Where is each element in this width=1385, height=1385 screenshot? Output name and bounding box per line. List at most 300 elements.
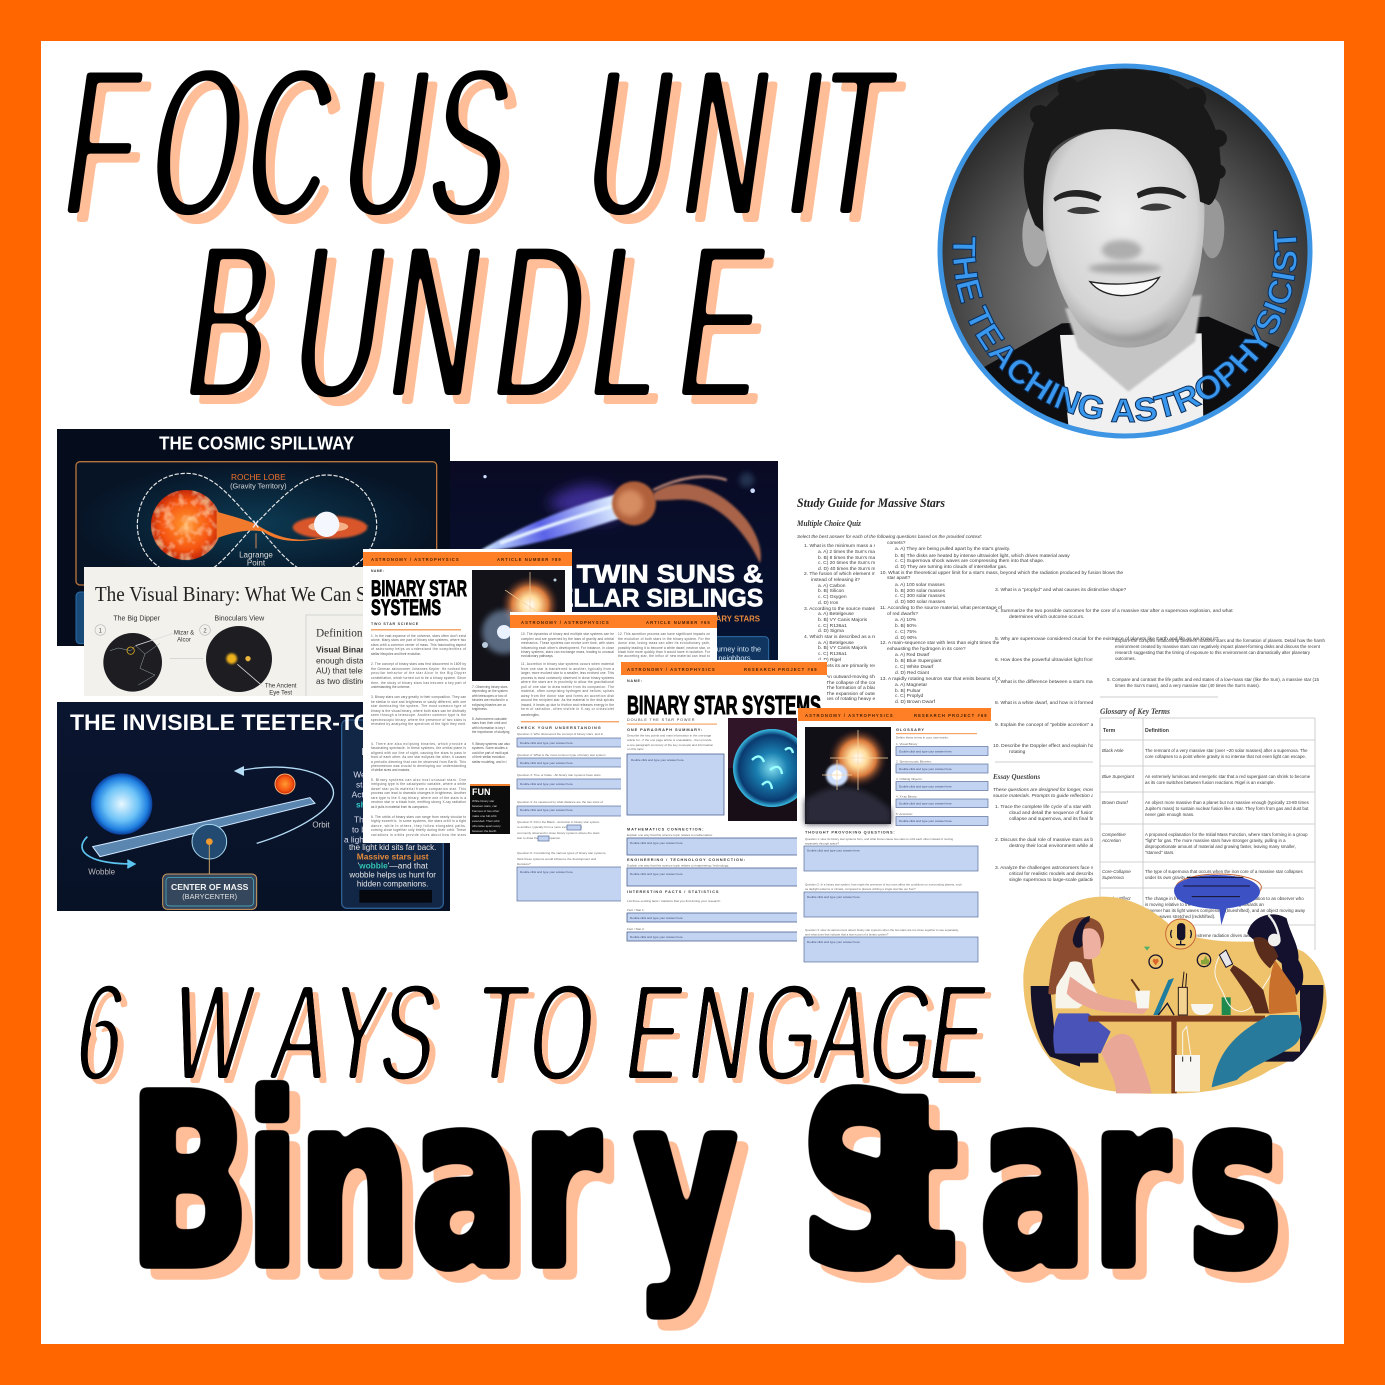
article page 2: check your understanding: material, often comprising hydrogen and helium, spirals [521,689,614,693]
quiz column 1: 2. The fusion of which element mark [804,571,883,577]
body text column 2: with telescopes or two of [472,694,507,698]
label: mizar and alcor: Mizar & [174,631,194,637]
quiz column 2: b. B) 50% [895,623,917,629]
body text column 1: as it pulls in material from its companion. [371,805,429,809]
plasma arc [653,484,761,563]
body text column 1: be similar in size and brightness or vastly different, with one [371,700,466,704]
glossary table: Accretion [1101,838,1121,843]
article page 2: check your understanding: Double click and type your answer here. [520,782,574,786]
research project page: Double click and type your answer here. [630,916,684,920]
fun fact box [470,784,515,834]
body text column 2 [472,685,510,764]
fun fact box: extended. Their orbit [472,819,500,823]
research project page 2: glossary: Define these terms in your own words: [896,736,949,740]
label: roche lobe: ROCHE LOBE [231,472,286,482]
body text column 2: stellar modeling, and in t [472,760,507,764]
label: lagrange point: Lagrange [239,550,273,559]
essay continuation [1100,638,1325,697]
body text column 1: process can lead to dramatic changes in brightness. Another [371,791,467,795]
quiz column 1: d. D) Iron [818,600,839,606]
nose shadow [1102,240,1142,260]
article page 2: check your understanding: commonly observed in close binary systems where the stars [517,831,600,835]
engineering connection: ENGINEERING / TECHNOLOGY CONNECTION: [627,857,746,862]
quiz column 1: 1. What is the minimum mass a star [804,543,882,549]
short answer column: 3. What is a "proplyd" and what causes its distinctive shape? [995,587,1127,593]
body text column 2: could be part of multi-syst [472,751,508,755]
research project page 2: glossary: 2. Spectroscopic Binaries: [896,760,932,764]
short answer column continued: source materials. Prompts to guide reflection are provid [993,793,1113,799]
quiz column 1: comets its are primarily res [818,663,877,669]
woman right: hair [1247,914,1303,995]
quiz column 1: c. C) Oxygen [818,594,847,600]
quiz column 1: An outward-moving sho [826,674,878,680]
quiz column 2: c. C) 300 solar masses [895,593,946,599]
glossary table: The change in frequency or wavelength of radiation in relation to an observer who [1145,896,1304,901]
body text column 1: revealed by analyzing the spectrum of the light they emit. [371,722,466,726]
body text column 1: fascinating spectacle. In these systems, the orbital plane is [371,746,466,750]
step badge 2 [200,625,210,635]
glossary table: as its core switches between fusion reactions. Rigel is an example. [1145,780,1275,785]
comet tail [478,493,625,552]
quiz column 1: b. B) 8 times the Sun's mass [818,555,881,561]
glossary table: "starved" stars. [1145,850,1174,855]
woman right: phone [1219,950,1233,967]
quiz column 1: d. D) Sigma [818,628,844,634]
research project page: RESEARCH PROJECT #69 [744,667,818,672]
woman left: shorts [1053,1013,1111,1053]
quiz column 2: 11. According to the source material, what percentage of [880,605,1003,611]
glossary answer boxes [896,746,988,826]
quiz column 1: The collapse of the core [826,680,878,686]
article page 2: check your understanding: from one star is transferred to another, typically from a [521,667,614,671]
glossary header: GLOSSARY [896,727,925,732]
article page 2 header and top columns: ASTRONOMY / ASTROPHYSICS [521,620,610,625]
fun fact box: Famous of two other [472,809,499,813]
short answer column continued: 9. Explain the concept of "pebble accretion" as a mechanism [995,722,1126,728]
body text column 1: a periodic dimming that can be observed from Earth. This [371,760,466,764]
research project page 2: glossary: Double click and type your answer here. [807,848,861,852]
hair [1024,65,1227,232]
photo: binary star flare [805,727,891,824]
body text column 2: systems. Some studies a [472,746,508,750]
photo: star field [472,570,565,681]
quiz column 2: a. A) 10% [895,617,917,623]
body text column 1: 6. The orbits of binary stars can range from nearly circular to [371,815,466,819]
article page 2: check your understanding: pull of one star to draw matter from its companion. The [521,685,614,689]
quiz column 1: c. C) R136a1 [818,651,847,657]
body text column 1: 1. In the vast expanse of the universe, stars often don't exist [371,634,466,638]
disrupted star [612,481,656,525]
article page 2: check your understanding: Double click and type your answer here. [520,808,574,812]
quiz column 2: a. A) They are being pulled apart by the star's gravity. [895,546,1010,552]
green heart [1144,947,1150,951]
quiz column 1: 4. Which star is described as a red [804,634,879,640]
body text column 2: 8. Astronomers calculate [472,717,507,721]
glossary table: Jupiter's mass) to sustain nuclear fusion like a star. They form from gas and dust but [1145,806,1309,811]
white companion star [314,512,339,537]
right text panel: the light kid sits far back. [349,843,436,852]
essay continuation: outcomes. [1115,656,1136,661]
slide: The Visual Binary: Definition [316,628,363,640]
article page 2: check your understanding [510,613,717,907]
slide: The Visual Binary: Eye Test [269,690,292,696]
body text column 1: stars orbit a common center of mass. This fascinating aspect [371,643,466,647]
right text panel: a ligh [344,834,364,844]
mass stream [217,512,370,541]
body text column 2: depending on the system [472,689,508,693]
glossary table: The remnant of a very massive star (over ~20 solar masses) after a supernova. The [1145,748,1308,753]
quiz column 1: a. A) Carbon [818,583,846,589]
research project page: ASTRONOMY / ASTROPHYSICS [627,667,716,672]
face [1042,127,1204,348]
right text panel: Binary [362,747,392,758]
article page 1 [363,549,572,843]
one paragraph summary: ONE PARAGRAPH SUMMARY: [627,727,703,732]
quiz column 2: c. C) Proplyd [895,693,924,699]
shirt [1060,333,1203,442]
research project page: Double click and type your answer here. [630,935,684,939]
woman right: top [1269,960,1297,1014]
short answer column continued: Essay Questions [992,773,1041,781]
body text column 1: of stellar sizes and masses. [371,768,410,772]
research project page: List three exciting facts / statistics that you find during your research: [627,899,721,903]
short answer column continued: rotating [1009,749,1026,755]
glossary table: Term [1103,728,1116,734]
lagrange marker: X [252,519,259,530]
coffee cup [1135,991,1150,1008]
article page 2: check your understanding: Question 3: True or False - All binary star systems have stars [517,773,601,777]
speech bubble outline [1176,874,1261,901]
short answer column continued: 10. Describe the Doppler effect and explain how astronomers [993,743,1126,749]
eyes [1067,203,1172,214]
body text column 2: with information is key t [472,726,505,730]
title: Focus Unit Bundle [52,25,906,446]
body text column 1: understanding the universe. [371,685,410,689]
right text panel: The [354,815,369,825]
body text column 2: of their stellar evolution. [472,755,506,759]
heading: 6 Ways to Engage: 6 WAYS TO ENGAGE [68,956,995,1110]
table [1088,1016,1265,1093]
orange header [621,662,827,675]
quiz column 2: b. B) Blue Supergiant [895,658,942,664]
quiz column 2: a. A) Red Dwarf [895,652,930,658]
bowl [1191,1004,1213,1015]
accretion disc [293,516,367,539]
research project page: Describe the key points and main information in the one-page [627,734,712,738]
headphone cable [1215,953,1277,1011]
label: binoculars view: Binoculars View [215,616,265,623]
glossary table: "fight" for gas. The more massive stars have stronger gravity, pulling in a [1145,838,1286,843]
short answer column continued: 3. Analyze the challenges astronomers face when [995,865,1103,871]
portrait badge: The Teaching Astrophysicist: THE TEACHING ASTROPHYSICIST [952,230,1298,422]
research project page 2: glossary: Double click and type your answer here. [899,750,953,754]
article page 2 header and top columns: mechanics. These systems can evolve over time, with stars [521,641,614,645]
yellow blob [1023,897,1327,1094]
quiz column 2 [880,540,1123,705]
quiz column 2: of red dwarfs? [887,611,918,617]
research project page 2: glossary: Double click and type your answer here. [807,895,861,899]
short answer column continued [992,657,1126,883]
research project page 2: glossary: Double click and type your answer here. [807,940,861,944]
slide: Twin Suns and Stellar Siblings [450,461,778,680]
article page 2 header and top columns: binary systems, stars can exchange mass, leading to unusual [521,650,614,654]
research project page 2: glossary: 4. X-ray Binary: [896,794,917,798]
interesting facts: INTERESTING FACTS / STATISTICS [627,889,719,894]
glossary table: Definition [1145,728,1169,734]
small red star [275,774,295,794]
thought provoking questions: THOUGHT PROVOKING QUESTIONS: [805,830,895,834]
microphone badge [1166,919,1196,949]
short answer column [995,587,1233,642]
speech bubble lines [1183,877,1250,897]
essay continuation: research suggesting that the timing of exposure to this environment can dramatically alter planetary [1115,650,1311,655]
research project page: on this topic. [627,747,645,751]
sky circle: constellation [103,633,162,692]
short answer column continued: 7. What is the difference between a star's mass on the [995,679,1113,685]
glossary table: A massive star where the extreme radiation drives away material from the [1145,933,1288,938]
article page 2: check your understanding: Double click and type your answer here. [520,870,574,874]
fun fact box: between the Earth [472,829,497,833]
research project page: Explain one way that this science topic relates to engineering / technology: [627,864,729,868]
glossary table: core collapses to a point where gravity is so intense that not even light can escape. [1145,754,1306,759]
neck [1065,295,1202,392]
glossary table: is moving relative to the source; an object moving towards an [1145,902,1264,907]
body text column 1: highly eccentric. In some systems, the stars orbit in a tight [371,819,466,823]
vase [1178,972,1187,1015]
body text column 2: 9. Binary systems can also [472,742,510,746]
fun fact box: make one full orbit [472,814,497,818]
body text column 1: 2. The concept of binary stars was first discovered in 1609 by [371,662,466,666]
quiz column 2: star apart? [887,575,911,581]
article page 2: check your understanding: where the stars are in proximity to allow the gravitational [521,680,614,684]
short answer column continued: 8. What is a white dwarf, and how is it formed? [995,700,1096,706]
slide: The Visual Binary: Visual Binaries [316,644,376,654]
slide: The Visual Binary: as two distinct [316,676,369,686]
purple haze [547,485,620,521]
red giant star [151,490,221,560]
body text column 1: front of each other. As one star eclipses the other, it causes [371,755,466,759]
title: Focus Unit Bundle: BUNDLE [173,199,779,446]
fulcrum sphere [192,824,227,875]
article page 2: check your understanding: star to draw from its companion. [517,836,561,840]
right text panel [342,720,443,908]
ears [1022,203,1049,267]
quiz column 2: b. B) 200 solar masses [895,588,946,594]
quiz column 1: The expansion of outer [826,691,876,697]
short answer column: 4. Summarize the two possible outcomes for the core of a massive star after a supernova explosion, and what [995,608,1233,614]
name label: NAME: [371,569,384,573]
quiz column 2: a. A) 100 solar masses [895,582,945,588]
orange header [363,552,572,566]
heading: THE INVISIBLE TEETER-TOTTER [70,710,432,735]
short answer column: 5. Why are supernovae considered crucial for the existence of planets like Earth and life as we know it? [995,636,1219,642]
woman left: hair front [1048,935,1078,994]
research project page 2: glossary: ASTRONOMY / ASTROPHYSICS [805,713,894,718]
woman left: headphones [1073,916,1090,948]
subhead: DOUBLE THE STAR POWER [627,718,695,722]
short answer column: determines which outcome occurs. [1009,614,1084,620]
research project page 2: glossary: Question 2: In a binary star system, how might the presence of two suns affect the conditions on surrounding planets, such [805,882,962,886]
short answer column continued: critical for realistic models and describe the "arc [1009,871,1113,877]
slide: The Invisible Teeter-Totter [57,702,450,911]
glossary table: Competitive [1102,832,1126,837]
right chair [1257,985,1323,1062]
article page 2: check your understanding: Question 6: Considering the various types of binary star systems, [517,851,606,855]
body text column 2: brightness. [472,707,488,711]
article page 2 header and top columns: ARTICLE NUMBER #65 [646,620,711,625]
suit [982,317,1282,438]
research project page 2: glossary: separately through space? [805,842,839,846]
article page 2 header and top columns: the accreting star, the influx of new material can lead to [618,654,710,658]
glossary table [1100,718,1315,950]
quiz column 2: comets? [887,540,906,546]
shopping bag [1175,1055,1200,1092]
woman left: face [1082,928,1101,959]
quiz column 2: a. A) Magnetar [895,682,927,688]
quiz column 1: c. C) 20 times the Sun's mass [818,560,883,566]
background stars [483,475,487,478]
heading: Binary Stars: Binary Stars [128,1045,1282,1320]
body text column 2: binaries are resolved in a [472,698,508,702]
glossary table: A proposed explanation for the Initial Mass Function, where stars forming in a group [1145,832,1308,837]
research project page: Double click and type your answer here. [631,758,685,762]
quiz column 2: c. C) 75% [895,629,917,635]
slide: Twin Suns and Stellar Siblings: Journey into the [709,644,761,653]
title: Focus Unit Bundle: FOCUS UNIT [52,25,906,262]
quiz column 1: a. A) Betelgeuse [818,611,854,617]
mizar highlight [127,647,134,654]
left chair [1031,986,1098,1067]
short answer column continued: single supernova to large-scale galactic circula [1009,877,1110,883]
essay continuation: Explore the complex relationship between massive stars and the formation of planets. Detail how the harsh [1115,638,1325,643]
fun fact box: FUN [472,787,490,797]
quiz column 2: b. B) Pulsar [895,688,921,694]
name label: NAME: [627,679,643,683]
portrait badge: The Teaching Astrophysicist [938,64,1312,438]
heading: The Visual Binary: What We Can See [95,584,384,606]
article page 1: ARTICLE NUMBER #89 [497,557,562,562]
article page 2 header and top columns: 12. This accretion process can have significant impacts on [618,632,710,636]
body text column 1: constellation, which turned out to be a binary system. Since [371,676,466,680]
research project page 2: glossary [797,708,992,966]
research project page: Double click and type your answer here. [630,872,684,876]
quiz column 1: b. B) VY Canis Majoris [818,645,868,651]
body text column 1: coming close together only briefly during their orbit. These [371,828,466,832]
step badge 1: 1 [99,628,103,634]
research project page 2: glossary: Question 1: How do binary star systems form, and what forces cause two stars to orbit each other instead of moving [805,837,954,841]
short answer column continued: 1. Trace the complete life cycle of a star with 25 tim [995,804,1106,810]
article page 2 header and top columns: possibly leading it to become a white dwarf, neutron star, or [618,646,711,650]
slide: The Cosmic Spillway [57,429,450,646]
slide: Twin Suns and Stellar Siblings: STELLAR SIBLINGS [525,585,763,613]
research project page 2: glossary: as daylight patterns or climate, compared to planets orbiting a single star like our Sun? [805,887,916,891]
research project page: Fact / Stat 1: [627,908,645,912]
article page 1: ASTRONOMY / ASTROPHYSICS [371,557,460,562]
research project page 2: glossary: Double click and type your answer here. [899,784,953,788]
article page 2: check your understanding: literature? [517,862,531,866]
short answer column continued: destroy their local environment while also enabli [1009,843,1113,849]
research project page [621,660,827,950]
photo: blue planet star [728,718,818,821]
short answer column continued: cloud and detail the sequence of fusion stages it [1009,810,1114,816]
short answer column continued: 2. Discuss the dual role of massive stars as both d [995,837,1104,843]
quiz column 2: c. C) White Dwarf [895,664,934,670]
green cup [1222,997,1231,1015]
quiz column 1: a. A) 2 times the Sun's mass [818,549,880,555]
massive blue star [91,773,152,835]
thumbs up badge [1197,953,1211,967]
step badge 2: 2 [203,628,207,634]
quiz column 2: 13. A rapidly rotating neutron star that emits beams of X [880,676,1001,682]
article page 2 header and top columns [510,612,717,660]
article page 2: check your understanding: around the recipient star. As the material in the disk spirals [521,698,614,702]
slide: The Visual Binary: Alcor [177,637,191,643]
eyebrows [1053,187,1187,202]
short answer column continued: These questions are designed for longer, more detailed [993,787,1113,793]
article page 2: check your understanding: CHECK YOUR UNDERSTANDING [517,726,602,730]
article page 2: check your understanding: Question 2: What is the most common type of binary star system [517,753,606,757]
article page 2: check your understanding: inward, it heats up due to friction and releases energy in the [521,703,614,707]
body text column 1: 3. Binary stars can vary greatly in their composition. They can [371,695,466,699]
stubble [1090,322,1168,342]
fun fact box: otherwise apart every [472,824,501,828]
article page 2 header and top columns: influencing each other's development. For instance, in close [521,646,614,650]
article page 2: check your understanding: process is most commonly observed in close binary systems [521,676,614,680]
research project page 2: glossary: Double click and type your answer here. [899,802,953,806]
right text panel: 'wobble'—and that [358,860,428,870]
glossary table: Core-Collapse [1102,869,1131,874]
article page 2: check your understanding: form of radiation, often visible in X-ray or ultraviolet [521,707,614,711]
label: the ancient eye test: The Ancient [265,683,297,689]
quiz column 1: d. D) 40 times the Sun's mass [818,566,884,572]
body text column 1: phenomenon was crucial to developing our understanding [371,764,466,768]
article page 1: SYSTEMS [371,595,441,620]
article page 2: check your understanding: Double click and type your answer here. [520,761,574,765]
body text column 2: the importance of studying [472,730,510,734]
label: orbit: Orbit [312,820,330,829]
step badge 1 [95,625,106,635]
fun fact box: between stars, can [472,804,498,808]
sky circle: binoculars [206,626,272,692]
headline: BINARY STAR SYSTEMS [627,690,821,720]
quiz column 2: c. C) Supernova shock waves are compressing them into that shape. [895,558,1044,564]
center of mass label: CENTER OF MASS [171,882,249,892]
research project page: article for - if the one page article is unavailable - then provide [627,738,712,742]
quiz column 1: The formation of a black [826,685,879,691]
woman right: jeans [1212,1015,1302,1087]
article page 2: check your understanding: to another, typically from a more evolved star to [517,825,582,829]
subtitle: BINARY STARS [702,615,760,624]
body text column 1: spectroscopic binary, where the presence of two stars is [371,718,466,722]
dashed lemniscate [137,473,377,577]
woman right: headphones [1268,915,1279,938]
woman left: arm [1067,977,1148,1014]
quiz column 1: 3. According to the source material, [804,606,881,612]
article page 2 header and top columns: 10. The dynamics of binary and multiple star systems can be [521,632,614,636]
glossary table: disproportionate amount of material and growing faster, leaving many smaller, [1145,844,1296,849]
article page 2: check your understanding: Question 4: As measured by what distance are the two stars of [517,800,603,804]
research project page 2: glossary: Question 3: How do astronomers detect binary star systems when the two stars are too close together to see separately, [805,928,959,932]
research project page 2: glossary: and what does that indicate that a star is part of a binary system? [805,932,889,936]
body text column 1 [371,634,467,837]
spoon [1131,979,1139,991]
subhead: TWO STAR SCIENCE [371,622,419,626]
slide: The Visual Binary: AU) that telescopes [316,666,389,676]
quiz column 2: d. D) They are turning into clouds of interstellar gas. [895,564,1007,570]
essay continuation: times the Sun's mass), and a very massive star (40 times the Sun's mass). [1115,683,1260,688]
research project page 2: glossary: 1. Visual Binary [896,742,918,746]
body text column 2: eclipsing binaries are co [472,703,506,707]
